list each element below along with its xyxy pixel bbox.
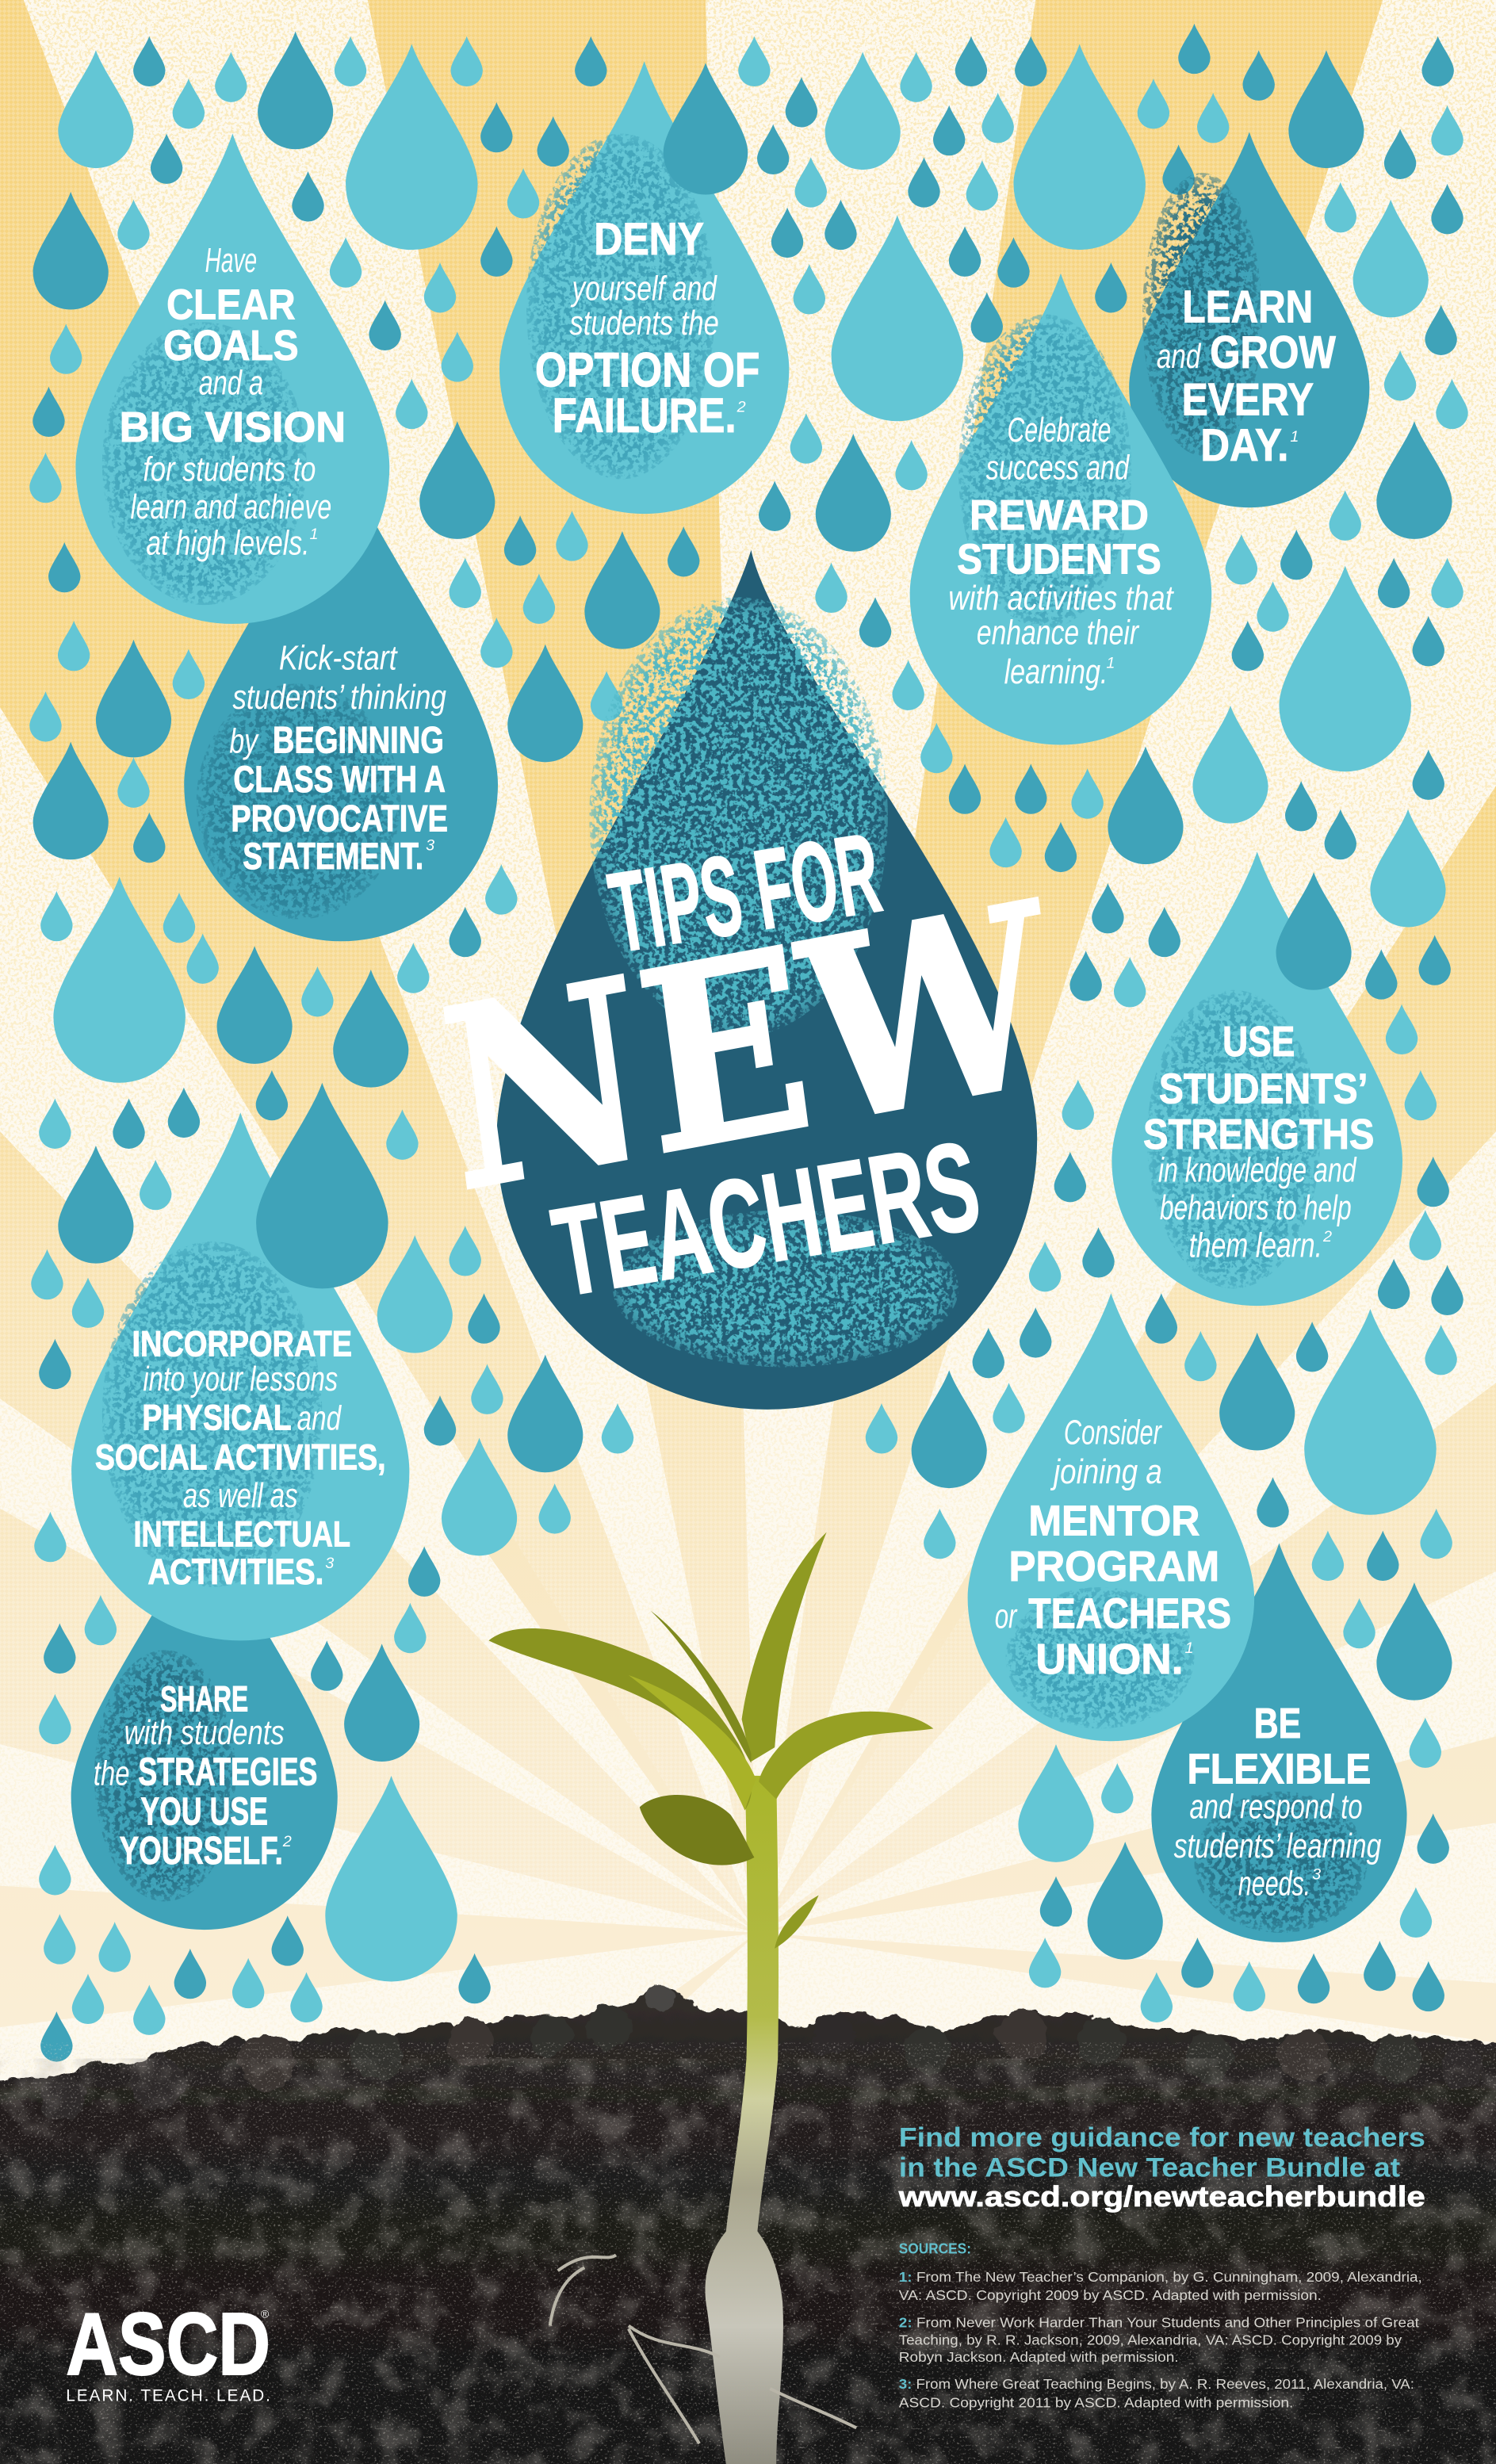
teal line one: Find more guidance for new teachers bbox=[899, 2123, 1425, 2153]
tip text: SHARE bbox=[160, 1679, 248, 1720]
tip text bbox=[1143, 1019, 1374, 1265]
tip: mentor program bbox=[968, 1293, 1254, 1741]
tip text: YOURSELF. bbox=[120, 1828, 283, 1873]
tip text: 2 bbox=[737, 398, 746, 415]
tip text: UNION. bbox=[1035, 1636, 1184, 1683]
tip text: DENY bbox=[594, 214, 704, 265]
teal line two: in the ASCD New Teacher Bundle at bbox=[899, 2152, 1401, 2183]
tip text: CLASS WITH A bbox=[233, 759, 446, 801]
tip text: GOALS bbox=[163, 323, 299, 369]
tip text: into your lessons bbox=[143, 1360, 338, 1398]
tip text: STUDENTS’ bbox=[1159, 1066, 1368, 1112]
sources heading: SOURCES: bbox=[899, 2240, 971, 2256]
grain lower bbox=[613, 1210, 958, 1367]
drop shape bbox=[71, 1513, 338, 1930]
tip text: 1 bbox=[1185, 1639, 1194, 1657]
plant bbox=[488, 1532, 933, 2464]
tip text: Have bbox=[205, 242, 257, 280]
drop shape bbox=[968, 1293, 1254, 1741]
tip text: BIG VISION bbox=[120, 404, 346, 451]
source list: 1: From The New Teacher’s Companion, by G. Cunningham, 2009, Alexandria, bbox=[899, 2269, 1422, 2285]
tip text: STRENGTHS bbox=[1143, 1111, 1374, 1158]
grain bbox=[1142, 173, 1262, 456]
tip text: Celebrate bbox=[1008, 411, 1111, 450]
tip text: learn and achieve bbox=[131, 488, 331, 526]
tip text: and bbox=[297, 1400, 342, 1438]
tip text: REWARD bbox=[970, 492, 1149, 539]
tip text: students’ thinking bbox=[232, 679, 446, 717]
tip text: BEGINNING bbox=[273, 719, 444, 761]
tip text: joining a bbox=[1050, 1453, 1162, 1491]
ASCD logo bbox=[66, 2295, 270, 2405]
soil mass bbox=[0, 1984, 1496, 2464]
heading: new: NEW bbox=[428, 847, 1069, 1248]
tip: be flexible bbox=[1151, 1543, 1407, 1942]
rootlets bbox=[550, 2255, 856, 2443]
tip text: USE bbox=[1222, 1019, 1295, 1066]
tip text: STATEMENT. bbox=[243, 836, 423, 878]
soil clumps bbox=[0, 2059, 1496, 2464]
tip text: enhance their bbox=[977, 614, 1139, 652]
tip: clear goals bbox=[75, 133, 389, 624]
tip text: yourself and bbox=[570, 270, 717, 308]
tip text: 1 bbox=[1106, 654, 1115, 671]
tip: share strategies bbox=[71, 1513, 338, 1930]
drop shape bbox=[184, 451, 498, 941]
tip: incorporate activities bbox=[71, 1112, 409, 1640]
top leaf bbox=[742, 1532, 827, 1762]
source list bbox=[899, 2269, 1422, 2411]
tip text bbox=[229, 639, 448, 878]
tip text bbox=[95, 1324, 386, 1592]
grain bbox=[94, 1650, 235, 1901]
tip text: FAILURE. bbox=[553, 388, 737, 443]
tip text bbox=[535, 214, 759, 443]
tip text: EVERY bbox=[1182, 374, 1314, 425]
tip text bbox=[94, 1679, 317, 1873]
url: www.ascd.org/newteacherbundle bbox=[898, 2181, 1425, 2213]
tip text: BE bbox=[1254, 1701, 1301, 1747]
tip text: OPTION OF bbox=[535, 343, 759, 398]
drop shape bbox=[71, 1112, 409, 1640]
drop shape bbox=[496, 550, 1037, 1410]
tip text: by bbox=[229, 722, 259, 760]
source list: Teaching, by R. R. Jackson, 2009, Alexandria, VA: ASCD. Copyright 2009 by bbox=[899, 2332, 1402, 2347]
left leaf bbox=[488, 1628, 752, 1810]
tip text: 3 bbox=[325, 1555, 334, 1572]
drop shape bbox=[910, 274, 1211, 745]
drop shape bbox=[499, 61, 789, 514]
round leaf bbox=[640, 1795, 754, 1865]
grain bbox=[526, 133, 715, 480]
tiny leaf bbox=[775, 1895, 819, 1949]
tip text: 3 bbox=[1312, 1866, 1321, 1884]
tip text bbox=[948, 411, 1174, 691]
source list: Robyn Jackson. Adapted with permission. bbox=[899, 2349, 1179, 2365]
tip text: DAY. bbox=[1200, 420, 1288, 471]
sources bbox=[899, 2240, 1422, 2411]
tip text: 2 bbox=[1322, 1228, 1332, 1245]
source list: ASCD. Copyright 2011 by ASCD. Adapted with permission. bbox=[899, 2395, 1293, 2411]
tip text: and a bbox=[199, 365, 263, 403]
tip text: PROVOCATIVE bbox=[231, 798, 448, 840]
soil bbox=[0, 1984, 1496, 2464]
registered mark: ® bbox=[261, 2308, 269, 2321]
tip text bbox=[1174, 1701, 1381, 1903]
tip text: with students bbox=[124, 1714, 285, 1752]
tip text: PHYSICAL bbox=[142, 1398, 292, 1438]
source list: VA: ASCD. Copyright 2009 by ASCD. Adapted with permission. bbox=[899, 2287, 1322, 2303]
small leaf bbox=[651, 1611, 751, 1763]
grain bbox=[102, 1242, 322, 1587]
tip text: in knowledge and bbox=[1158, 1152, 1357, 1190]
tip text: needs. bbox=[1238, 1865, 1310, 1903]
tip text: learning. bbox=[1004, 653, 1108, 691]
grain upper bbox=[589, 597, 888, 1037]
tip text: Consider bbox=[1064, 1414, 1162, 1452]
tip text: SOCIAL ACTIVITIES, bbox=[95, 1437, 386, 1477]
tip text: students’ learning bbox=[1174, 1827, 1381, 1865]
tip: reward students bbox=[910, 274, 1211, 745]
tip text: and bbox=[1157, 338, 1202, 376]
heading: tips for: TIPS FOR bbox=[602, 809, 889, 977]
grain bbox=[197, 683, 400, 920]
tip text: YOU USE bbox=[140, 1789, 268, 1833]
mid blue drops bbox=[33, 24, 1463, 2062]
tip text: success and bbox=[986, 450, 1130, 488]
tip text: at high levels. bbox=[146, 525, 309, 563]
tip text: for students to bbox=[143, 451, 316, 489]
tip text: 1 bbox=[1290, 428, 1299, 446]
tip text: and respond to bbox=[1189, 1788, 1363, 1826]
drop shape bbox=[1129, 132, 1369, 507]
left leaf highlight bbox=[629, 1675, 756, 1810]
grain bbox=[1006, 1587, 1194, 1728]
tip text: behaviors to help bbox=[1160, 1189, 1352, 1227]
tip text: MENTOR bbox=[1028, 1498, 1199, 1545]
tip text: INCORPORATE bbox=[132, 1324, 352, 1364]
tip text bbox=[120, 242, 346, 563]
soil grain bbox=[0, 2043, 1496, 2464]
call to action bbox=[898, 2123, 1425, 2213]
central title drop bbox=[428, 550, 1069, 1410]
tip text: as well as bbox=[183, 1477, 298, 1515]
overlapping drop above deny tip bbox=[664, 63, 748, 194]
tip text: ACTIVITIES. bbox=[147, 1551, 323, 1592]
grain bbox=[958, 314, 1131, 629]
tip text: with activities that bbox=[948, 580, 1174, 618]
wordmark: ASCD bbox=[66, 2295, 270, 2393]
tip: deny failure bbox=[499, 61, 789, 514]
source list: 2: From Never Work Harder Than Your Students and Other Principles of Great bbox=[899, 2315, 1419, 2331]
tip text: LEARN bbox=[1183, 281, 1313, 332]
drop shape bbox=[75, 133, 389, 624]
tip text: 1 bbox=[309, 526, 319, 543]
grain bbox=[1194, 1792, 1367, 1933]
tip text: STUDENTS bbox=[957, 536, 1161, 583]
tip text bbox=[995, 1414, 1231, 1683]
source list: 3: From Where Great Teaching Begins, by A. R. Reeves, 2011, Alexandria, VA: bbox=[899, 2376, 1414, 2392]
drop shape bbox=[1151, 1543, 1407, 1942]
tip text: FLEXIBLE bbox=[1188, 1747, 1371, 1793]
heading: teachers: TEACHERS bbox=[544, 1114, 989, 1323]
tip text: or bbox=[995, 1597, 1018, 1636]
overlapping drop above incorporate tip bbox=[256, 1083, 388, 1288]
grain bbox=[102, 322, 307, 605]
overlapping drop above strengths tip bbox=[1276, 872, 1352, 990]
tip text: 2 bbox=[282, 1833, 292, 1850]
tip text bbox=[1157, 281, 1336, 471]
light blue drops bbox=[29, 36, 1468, 2035]
tip: learn and grow bbox=[1129, 132, 1369, 507]
stem and root bbox=[705, 1776, 783, 2464]
right leaf bbox=[759, 1712, 933, 1800]
tip: kick-start thinking bbox=[184, 451, 498, 941]
tip text: GROW bbox=[1210, 327, 1336, 378]
drop shape bbox=[1111, 851, 1402, 1306]
tip text: TEACHERS bbox=[1028, 1590, 1231, 1637]
tip text: STRATEGIES bbox=[138, 1750, 317, 1794]
tagline: LEARN. TEACH. LEAD. bbox=[66, 2387, 270, 2405]
rain drops bbox=[29, 24, 1468, 2062]
tip text: them learn. bbox=[1188, 1227, 1322, 1265]
grain bbox=[1147, 990, 1320, 1288]
tip text: PROGRAM bbox=[1009, 1544, 1219, 1590]
tip text: the bbox=[94, 1755, 130, 1793]
tip text: CLEAR bbox=[166, 281, 296, 328]
tip text: 3 bbox=[426, 836, 434, 854]
tip text: Kick-start bbox=[279, 639, 398, 677]
tip: use strengths bbox=[1111, 851, 1402, 1306]
tip text: students the bbox=[570, 304, 719, 342]
tip text: INTELLECTUAL bbox=[133, 1513, 350, 1554]
